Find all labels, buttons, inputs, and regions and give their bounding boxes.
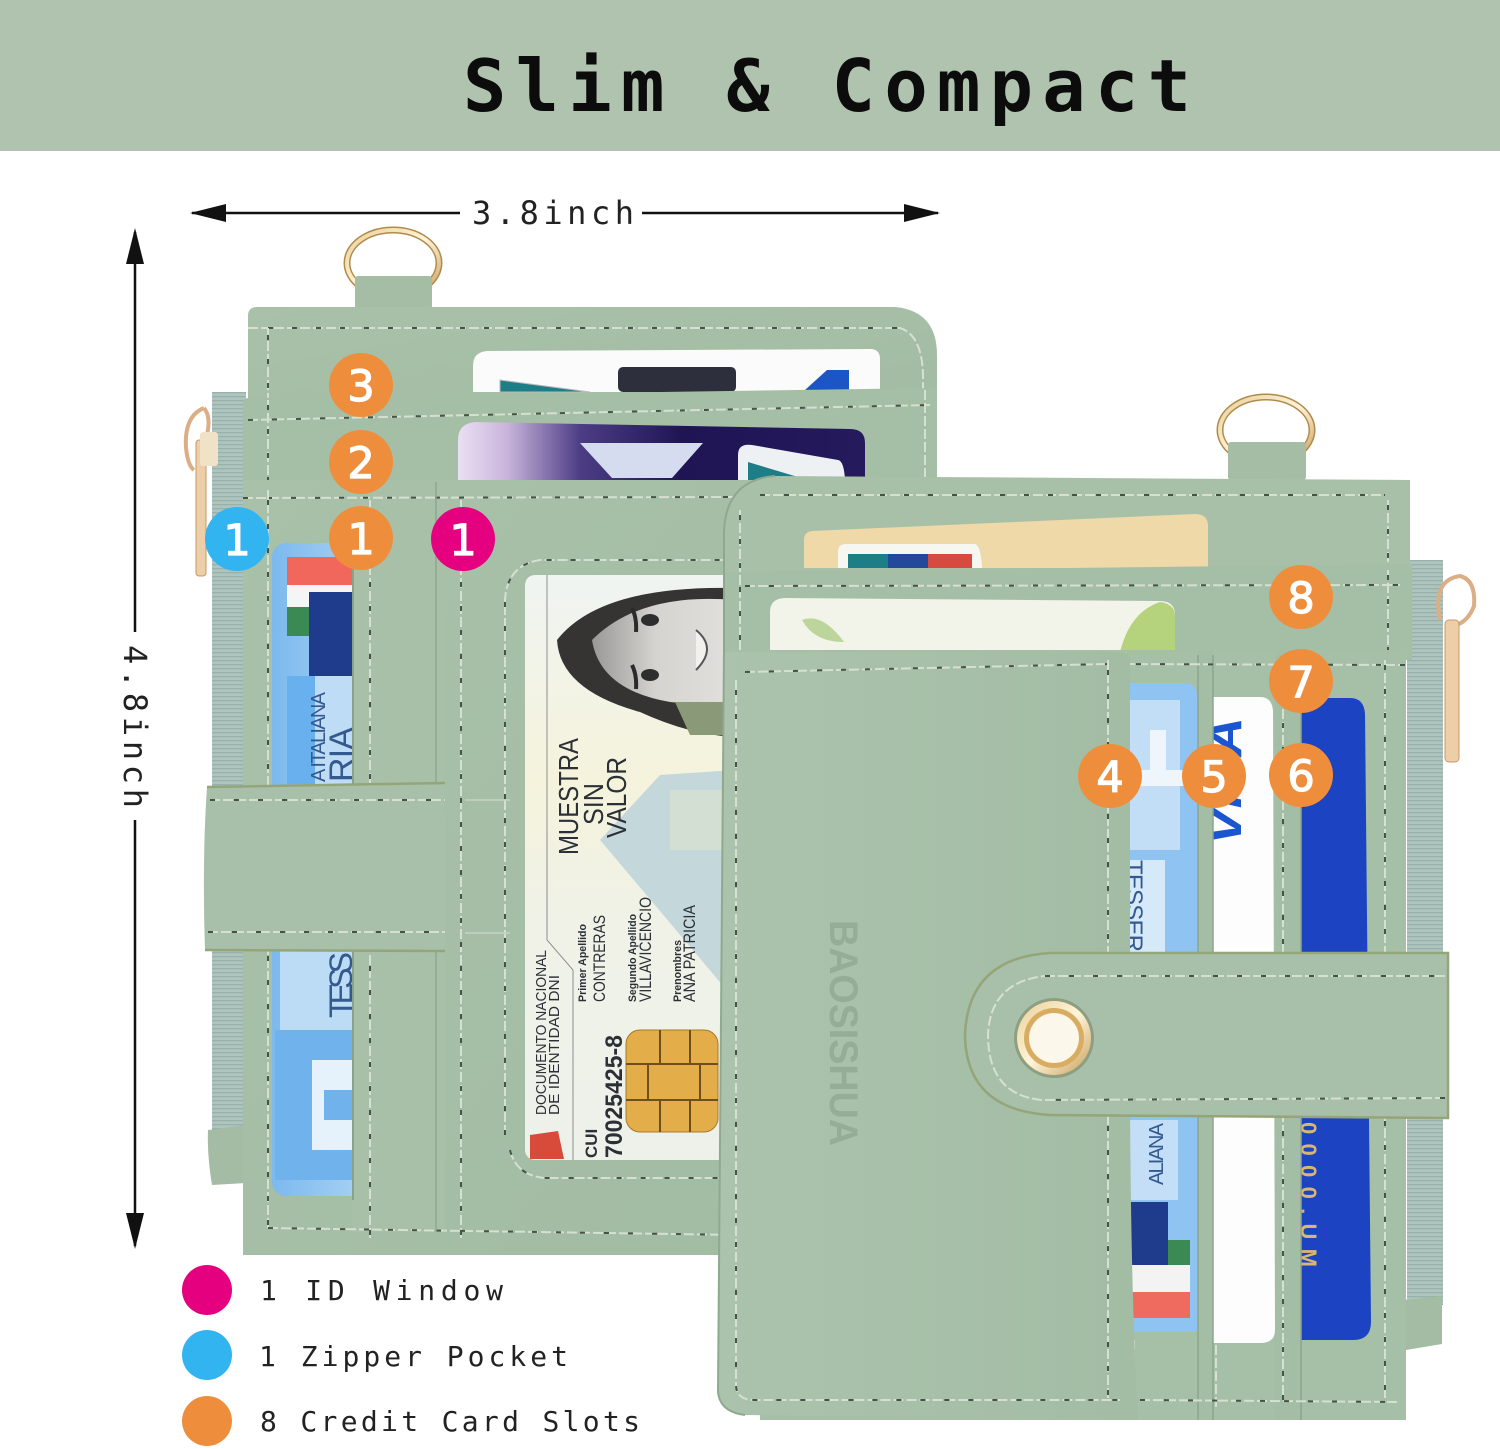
snap button: [1014, 998, 1094, 1078]
badge 3: 3: [347, 362, 375, 412]
badge 7: [1269, 649, 1333, 713]
height dimension arrow: [116, 228, 154, 1249]
front D-ring: [1220, 397, 1312, 480]
back wallet vertical stitching: [243, 482, 740, 1240]
second layer stitching: [248, 390, 930, 480]
width dimension arrow: [190, 194, 940, 232]
id card text: Primer Apellido: [577, 924, 589, 1002]
front flap pocket: [718, 540, 1138, 1420]
front strap: [965, 953, 1448, 1118]
light blue card: [1120, 683, 1205, 1332]
front wallet: [718, 397, 1474, 1420]
light blue card: ALIANA: [1146, 1122, 1168, 1185]
legend: [182, 1265, 640, 1446]
badge 1 orange: [329, 506, 393, 570]
yellow card in slot: [804, 514, 1208, 568]
blue card: 0000.UM: [1296, 1122, 1321, 1267]
front pocket panel: [760, 650, 1405, 1420]
slot dividers: [1198, 650, 1406, 1420]
badge 1 magenta: [431, 507, 495, 571]
id card text: CUI: [582, 1129, 601, 1158]
badge 4: 4: [1096, 753, 1124, 803]
id card: [525, 575, 735, 1160]
badge 2: [329, 430, 393, 494]
id card text: [533, 738, 699, 1158]
badge 2: 2: [347, 439, 375, 489]
card slot divider: [352, 482, 445, 1232]
blue card: [1296, 698, 1371, 1340]
blue card in left slot: TESS: [323, 952, 359, 1018]
slot cards upper: [1120, 683, 1371, 1343]
badge 3: [329, 353, 393, 417]
front second layer: [724, 564, 1412, 660]
white-green card in slot: [770, 598, 1175, 652]
second layer stitching: [745, 570, 1400, 650]
embossed brand: BAOSISHUA: [821, 920, 865, 1146]
badge 4: [1078, 744, 1142, 808]
blue card in left slot: [272, 543, 367, 1196]
id card chip: [626, 1030, 718, 1132]
id card text: ANA PATRICIA: [680, 904, 699, 1002]
back wallet strap: [204, 783, 445, 951]
white card: [1199, 697, 1275, 1343]
id portrait: [557, 588, 735, 737]
front top stitching: [760, 495, 1388, 565]
id window stitching: [505, 560, 740, 1178]
badge 5: 5: [1200, 753, 1228, 803]
badge 5: [1182, 744, 1246, 808]
second layer panel: [243, 388, 937, 490]
flap stitching: [736, 510, 1120, 1400]
header band: [0, 0, 1500, 151]
legend: credit card slots: 8 Credit Card Slots: [260, 1405, 640, 1438]
rear panel stitching: [248, 328, 923, 398]
legend: credit card slots: [182, 1396, 640, 1446]
orange card edge: [1300, 712, 1315, 746]
front top panel: [724, 476, 1410, 580]
front zipper: [1403, 560, 1443, 1350]
id card text: DE IDENTIDAD DNI: [546, 975, 563, 1115]
badge 6: 6: [1287, 752, 1315, 802]
legend: zipper pocket: [182, 1330, 568, 1380]
white card: VISA: [1199, 717, 1251, 845]
id card text: VALOR: [601, 757, 632, 838]
badge 1 orange: 1: [347, 515, 375, 565]
badge 1 blue: 1: [223, 516, 251, 566]
blue card in left slot: A ITALIANA: [308, 691, 330, 782]
light blue card: TESSER: [1120, 860, 1147, 952]
card in top slot: [473, 349, 880, 392]
id card text: Segundo Apellido: [627, 914, 639, 1002]
id card text: Prenombres: [672, 940, 684, 1002]
back wallet rear panel: [248, 307, 937, 420]
flap edge shadow: [718, 476, 775, 1415]
id card text: 70025425-8: [601, 1035, 628, 1158]
legend: zipper pocket: 1 Zipper Pocket: [259, 1340, 568, 1373]
id card text: DOCUMENTO NACIONAL: [533, 950, 550, 1115]
id card text: MUESTRA: [553, 738, 584, 855]
id card text: SIN: [578, 783, 609, 825]
id card text: CONTRERAS: [590, 915, 609, 1002]
back wallet left zipper: [208, 392, 246, 1185]
badge 1 blue: [205, 507, 269, 571]
purple card in slot: [458, 422, 865, 480]
width dimension arrow: 3.8inch: [472, 194, 634, 232]
id card text: VILLAVICENCIO: [636, 897, 655, 1002]
legend: id window: 1 ID Window: [260, 1274, 503, 1307]
back wallet: [186, 230, 937, 1255]
front pocket stitching: [1112, 660, 1405, 1410]
number badges: [205, 353, 1333, 808]
front pocket of back wallet: [243, 480, 800, 1255]
badge 1 magenta: 1: [449, 516, 477, 566]
badge 6: [1269, 743, 1333, 807]
badge 7: 7: [1287, 658, 1315, 708]
badge 8: 8: [1287, 574, 1315, 624]
front zipper pull: [1438, 576, 1474, 762]
title: Slim & Compact: [463, 44, 1191, 128]
legend: id window: [182, 1265, 503, 1315]
blue card in left slot: RIA: [323, 727, 361, 782]
id flag corner: [530, 1131, 564, 1159]
back wallet D-ring: [347, 230, 439, 309]
height dimension arrow: 4.8inch: [116, 645, 154, 808]
badge 8: [1269, 565, 1333, 629]
zipper pull left: [186, 408, 218, 576]
